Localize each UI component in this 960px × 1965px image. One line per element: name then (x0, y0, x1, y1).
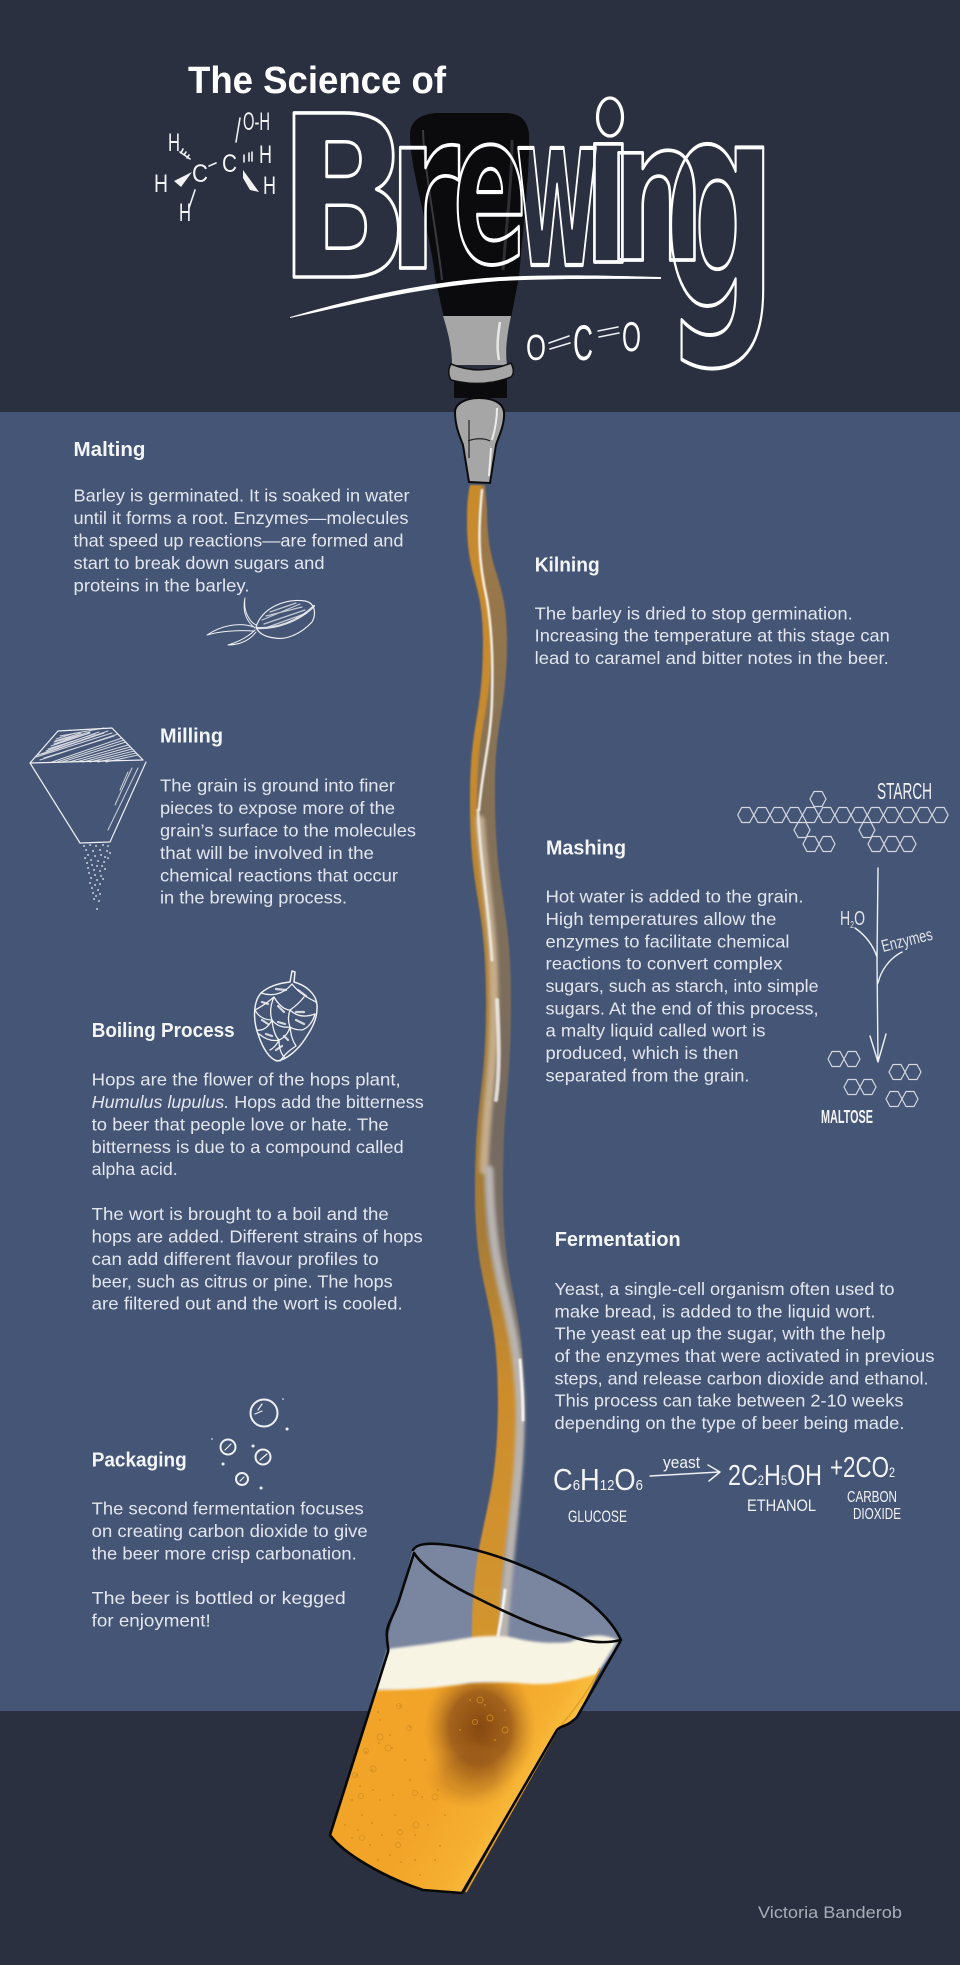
label: carbon dioxide (847, 1489, 901, 1523)
text: mashing body: separated from the grain. (546, 1065, 750, 1085)
icon: ethanol molecule: H (179, 199, 191, 227)
title lettering: Brewing: r (388, 64, 460, 320)
panel: boiling process (92, 971, 424, 1314)
text: fermentation body: This process can take between 2-10 weeks (554, 1391, 904, 1411)
text: boiling body: are filtered out and the wort is cooled. (92, 1294, 403, 1314)
icon: ethanol molecule: H (263, 172, 276, 200)
text: milling body (160, 776, 416, 908)
text: packaging body (92, 1498, 368, 1630)
title lettering: Brewing: i (581, 62, 636, 313)
text: mashing body: Hot water is added to the grain. (546, 887, 804, 907)
chemical formula: carbon dioxide: C (573, 315, 593, 371)
title lettering: Brewing: g (664, 37, 776, 374)
glass inner yellow edge (466, 1668, 600, 1892)
text: milling body: chemical reactions that occur (160, 865, 398, 885)
text: boiling body: beer, such as citrus or pine. The hops (92, 1271, 393, 1291)
panel: malting (74, 439, 410, 645)
icon: hop cone (255, 971, 317, 1061)
text: mashing body: produced, which is then (546, 1043, 738, 1063)
text: boiling body: Humulus lupulus. Hops add the bitterness (92, 1092, 424, 1112)
black nut (454, 376, 507, 398)
text: milling body: that will be involved in the (160, 843, 374, 863)
credit: author: Victoria Banderob (758, 1903, 902, 1922)
text: boiling body: hops are added. Different strains of hops (92, 1226, 423, 1246)
panel: packaging (92, 1399, 368, 1630)
text: kilning body: The barley is dried to stop germination. (535, 603, 853, 623)
beer bubbles (345, 1700, 520, 1875)
panel: fermentation (553, 1229, 935, 1526)
black tap handle (410, 113, 529, 318)
background: blue content panel (0, 412, 960, 1711)
label: water: O (854, 908, 865, 930)
title: The Science of: The Science of (188, 60, 446, 102)
text: mashing body: sugars, such as starch, into simple (546, 976, 818, 996)
background: dark header (0, 0, 960, 412)
beer stream (467, 485, 524, 1640)
icon: ethanol molecule: H (168, 129, 180, 157)
icon: bubbles (212, 1399, 287, 1488)
text: packaging body: The second fermentation focuses (92, 1498, 364, 1518)
text: fermentation body: The yeast eat up the sugar, with the help (554, 1324, 886, 1344)
equation: fermentation reaction (553, 1452, 901, 1526)
silver collar (443, 316, 511, 365)
text: malting body (74, 486, 410, 595)
label: carbon dioxide: DIOXIDE (853, 1506, 901, 1523)
maltose hexagons (828, 1052, 921, 1106)
label: water: 2 (850, 920, 854, 931)
icon: ethanol molecule: H (154, 170, 168, 198)
text: malting body: until it forms a root. Enzymes—molecules (74, 508, 409, 528)
nozzle (455, 398, 504, 483)
text: mashing body: reactions to convert complex (546, 954, 783, 974)
panel: mashing (546, 778, 948, 1127)
background: dark footer (0, 1711, 960, 1965)
text: kilning body: Increasing the temperature at this stage can (535, 626, 890, 646)
beer foam (376, 1636, 618, 1690)
label: yeast: yeast (663, 1453, 700, 1472)
icon: ethanol molecule: C (222, 150, 237, 178)
label: maltose: MALTOSE (821, 1107, 873, 1127)
heading: malting: Malting (74, 439, 146, 461)
text: mashing body (546, 887, 818, 1085)
text: kilning body: lead to caramel and bitter notes in the beer. (535, 648, 889, 668)
heading: boiling process: Boiling Process (92, 1020, 235, 1042)
text: kilning body (535, 603, 890, 668)
title lettering: Brewing: n (607, 78, 705, 306)
panel: kilning (535, 555, 890, 668)
text: boiling body: bitterness is due to a compound called (92, 1137, 404, 1157)
beer glass (330, 1544, 621, 1893)
text: boiling body: alpha acid. (92, 1159, 178, 1179)
text: milling body: in the brewing process. (160, 888, 347, 908)
heading: mashing: Mashing (546, 837, 626, 859)
text: malting body: proteins in the barley. (74, 575, 249, 595)
text: fermentation body: make bread, is added to the liquid wort. (554, 1301, 876, 1321)
label: ethanol: ETHANOL (747, 1496, 816, 1515)
heading: packaging: Packaging (92, 1450, 187, 1472)
formula: carbon dioxide: +2CO2 (830, 1452, 895, 1484)
beer liquid (330, 1670, 600, 1893)
chemical formula: carbon dioxide (526, 313, 641, 371)
text: boiling body: The wort is brought to a boil and the (92, 1204, 389, 1224)
starch hexagon chain (738, 792, 948, 852)
text: fermentation body (554, 1279, 935, 1433)
title lettering: Brewing: e (453, 69, 527, 312)
icon: ethanol molecule: H (259, 141, 272, 169)
icon: grain funnel (30, 728, 146, 909)
text: packaging body: on creating carbon dioxide to give (92, 1521, 368, 1541)
heading: kilning: Kilning (535, 555, 600, 577)
panel: milling (30, 726, 416, 909)
text: packaging body: the beer more crisp carbonation. (92, 1543, 357, 1563)
icon: ethanol molecule: C (192, 160, 208, 188)
title underline stroke (290, 275, 661, 318)
label: water: H (840, 908, 854, 930)
label: enzymes: Enzymes (879, 925, 934, 956)
text: boiling body: to beer that people love or hate. The (92, 1114, 389, 1134)
text: fermentation body: Yeast, a single-cell organism often used to (554, 1279, 895, 1299)
title lettering: Brewing (292, 96, 764, 371)
text: mashing body: sugars. At the end of this process, (546, 998, 818, 1018)
text: milling body: pieces to expose more of the (160, 798, 395, 818)
text: malting body: Barley is germinated. It is soaked in water (74, 486, 410, 506)
arrow: reaction (650, 1465, 720, 1481)
text: fermentation body: steps, and release carbon dioxide and ethanol. (554, 1368, 928, 1388)
text: mashing body: High temperatures allow the (546, 909, 776, 929)
glass back fill (376, 1543, 622, 1690)
text: fermentation body: depending on the type of beer being made. (554, 1413, 904, 1433)
icon: ethanol molecule (154, 108, 276, 227)
glass outline (330, 1544, 621, 1893)
formula: glucose: C6H12O6 (553, 1462, 643, 1497)
text: packaging body: for enjoyment! (92, 1610, 211, 1630)
formula: ethanol: 2C2H5OH (728, 1460, 822, 1492)
label: glucose: GLUCOSE (568, 1507, 627, 1526)
text: boiling body: can add different flavour profiles to (92, 1249, 379, 1269)
chemical formula: carbon dioxide: O (526, 327, 546, 368)
text: fermentation body: of the enzymes that were activated in previous (554, 1346, 935, 1366)
text: milling body: The grain is ground into finer (160, 776, 395, 796)
label: carbon dioxide: CARBON (847, 1489, 897, 1506)
text: boiling body (92, 1070, 424, 1314)
text: malting body: start to break down sugars and (74, 553, 324, 573)
text: packaging body: The beer is bottled or kegged (92, 1588, 346, 1608)
heading: milling: Milling (160, 726, 223, 748)
text: mashing body: a malty liquid called wort is (546, 1021, 766, 1041)
heading: fermentation: Fermentation (555, 1229, 681, 1251)
icon: ethanol molecule: O-H (243, 108, 270, 136)
diagram: starch to maltose (738, 778, 948, 1127)
title lettering: Brewing: B (278, 69, 411, 331)
text: boiling body: Hops are the flower of the hops plant, (92, 1070, 401, 1090)
title lettering: Brewing: w (515, 66, 599, 316)
icon: germinating barley (207, 598, 314, 645)
beer dark pour patch (424, 1662, 536, 1794)
chemical formula: carbon dioxide: O (622, 313, 641, 360)
text: mashing body: enzymes to facilitate chemical (546, 931, 790, 951)
reaction arrow (855, 868, 902, 1062)
silver ring (449, 363, 513, 383)
beer tap bottle handle (410, 113, 529, 483)
text: milling body: grain’s surface to the molecules (160, 821, 416, 841)
text: malting body: that speed up reactions—are formed and (74, 530, 404, 550)
